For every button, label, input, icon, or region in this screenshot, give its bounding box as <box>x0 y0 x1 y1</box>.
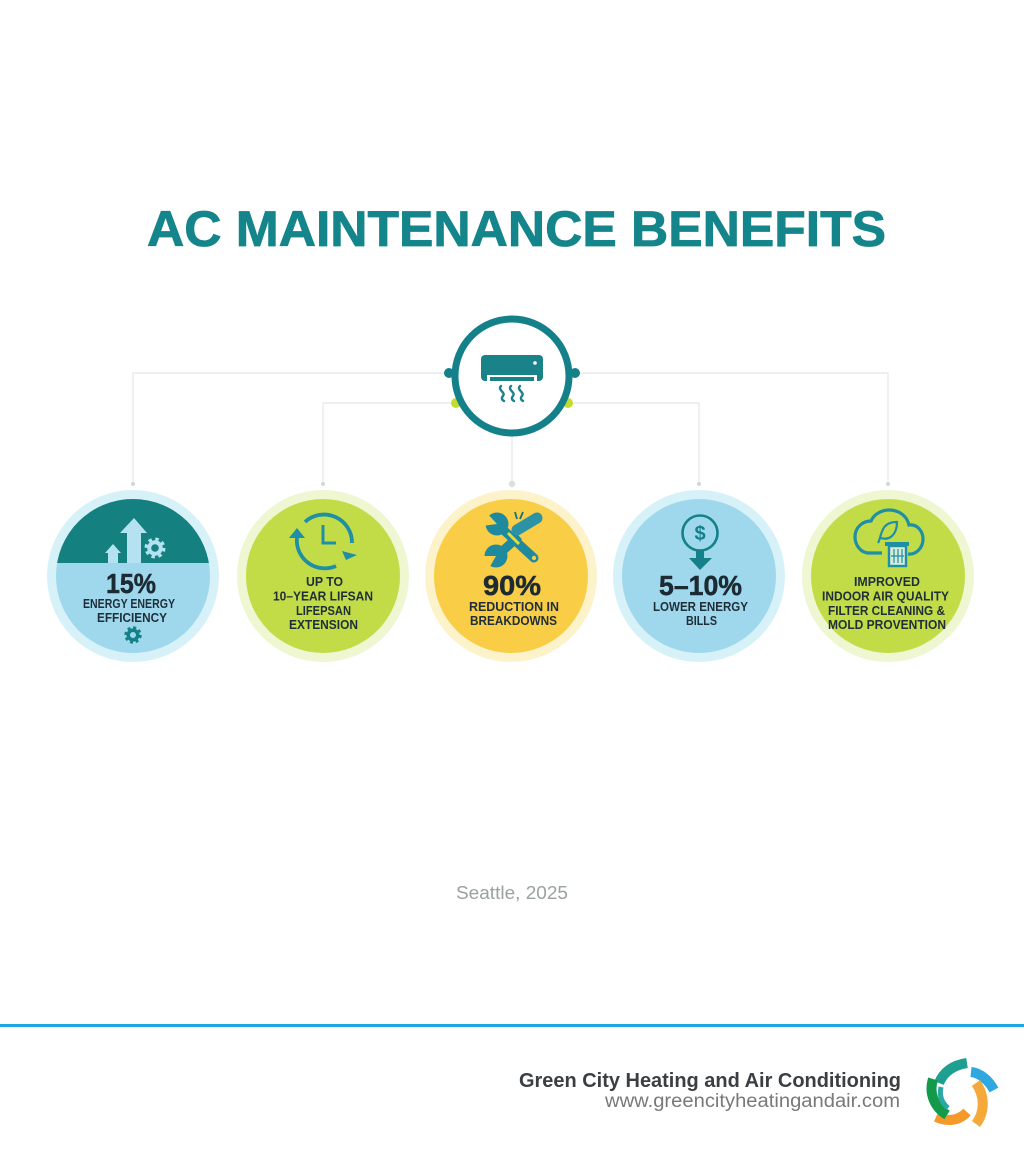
stat: 15%: 15% <box>106 568 156 599</box>
icon: gear lower <box>126 628 140 642</box>
label: air quality <box>822 575 950 632</box>
label: lifespan: UP TO <box>306 575 343 589</box>
footer website: www.greencityheatingandair.com <box>604 1091 900 1112</box>
icon: cloud, leaf and filter <box>855 510 923 566</box>
label: lifespan: EXTENSION <box>289 618 358 632</box>
label: lifespan: LIFEPSAN <box>296 604 351 618</box>
stat: 90%: 90% <box>483 570 541 601</box>
footer rule <box>0 1024 1024 1027</box>
label: energy efficiency: ENERGY ENERGY <box>83 597 176 611</box>
icon: gear upper <box>146 539 164 557</box>
location and year: Seattle, 2025 <box>456 883 568 903</box>
central AC icon <box>455 319 569 433</box>
label: air quality: MOLD PROVENTION <box>828 618 946 632</box>
icon: dollar with down arrow: $ <box>694 523 706 545</box>
label: energy efficiency: EFFICIENCY <box>97 611 168 625</box>
icon: clock with arrows <box>289 515 357 568</box>
connector nodes <box>444 368 580 408</box>
label: air quality: IMPROVED <box>854 575 920 589</box>
label: air quality: INDOOR AIR QUALITY <box>822 590 950 604</box>
label: lifespan <box>273 575 373 632</box>
panel: indoor air quality <box>802 490 974 662</box>
panel: lower energy bills <box>613 490 785 662</box>
icon: crossed wrenches <box>482 511 537 570</box>
label: bills: BILLS <box>686 614 717 628</box>
panel: reduction in breakdowns <box>425 490 597 662</box>
icon: rising arrows <box>105 518 147 563</box>
label: breakdowns <box>469 600 559 628</box>
panel: lifespan extension <box>237 490 409 662</box>
label: breakdowns: REDUCTION IN <box>469 600 559 614</box>
label: bills: LOWER ENERGY <box>653 600 749 614</box>
footer company name: Green City Heating and Air Conditioning <box>519 1070 901 1092</box>
title: AC MAINTENANCE BENEFITS <box>147 201 886 257</box>
label: lifespan: 10–YEAR LIFSAN <box>273 590 373 604</box>
stat: 5-10%: 5–10% <box>659 570 742 601</box>
connector lines <box>131 373 890 487</box>
label: energy efficiency <box>83 597 176 625</box>
icon: dollar with down arrow <box>682 516 718 570</box>
label: breakdowns: BREAKDOWNS <box>470 614 557 628</box>
label: bills <box>653 600 749 628</box>
label: air quality: FILTER CLEANING & <box>828 604 945 618</box>
logo <box>932 1063 994 1124</box>
panel: energy efficiency <box>47 490 219 662</box>
